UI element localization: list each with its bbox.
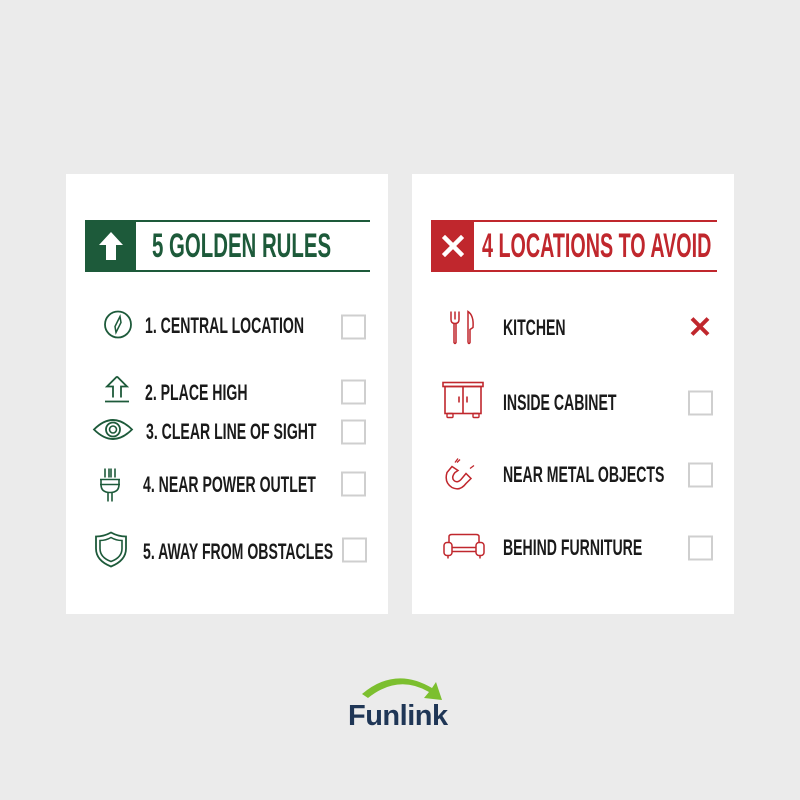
icon: green arc arrow <box>362 678 442 700</box>
logo text: Funlink <box>348 700 448 732</box>
avoid: kitchen: KITCHEN <box>503 315 566 340</box>
rule 2: 2. PLACE HIGH <box>145 380 247 405</box>
icon: compass <box>104 310 132 338</box>
icon: red x mark <box>690 317 710 336</box>
icon: up arrow <box>85 220 136 272</box>
checkbox: inside cabinet <box>688 390 713 416</box>
icon: cabinet <box>442 382 484 418</box>
icon: magnet <box>445 458 474 490</box>
rule 4: 4. NEAR POWER OUTLET <box>143 472 316 497</box>
checkbox: near metal objects <box>688 462 713 488</box>
icon: shield <box>95 532 127 568</box>
checkbox 5 <box>342 538 367 562</box>
icon: plug <box>100 468 120 502</box>
header: 4 locations to avoid <box>431 220 717 272</box>
checkbox 3 <box>341 420 366 444</box>
checkbox 1 <box>341 314 366 340</box>
avoid: behind furniture: BEHIND FURNITURE <box>503 535 642 560</box>
rule 5: 5. AWAY FROM OBSTACLES <box>143 539 333 564</box>
heading text: 5 GOLDEN RULES <box>152 227 331 265</box>
panel: golden rules <box>66 174 388 614</box>
rule 1: 1. CENTRAL LOCATION <box>145 313 304 338</box>
icon: arrow up <box>104 376 130 402</box>
checkbox 4 <box>341 472 366 496</box>
checkbox: behind furniture <box>688 536 713 560</box>
avoid: inside cabinet: INSIDE CABINET <box>503 390 616 415</box>
header: 5 golden rules <box>85 220 370 272</box>
avoid: near metal objects: NEAR METAL OBJECTS <box>503 462 664 487</box>
icon: eye <box>92 419 134 440</box>
panel: locations to avoid <box>412 174 734 614</box>
icon: x <box>431 220 474 272</box>
checkbox 2 <box>341 380 366 404</box>
icon: sofa <box>443 534 485 558</box>
rule 3: 3. CLEAR LINE OF SIGHT <box>146 419 317 444</box>
logo: funlink <box>348 678 448 732</box>
icon: fork and knife <box>450 310 474 344</box>
heading text: 4 LOCATIONS TO AVOID <box>482 227 711 265</box>
